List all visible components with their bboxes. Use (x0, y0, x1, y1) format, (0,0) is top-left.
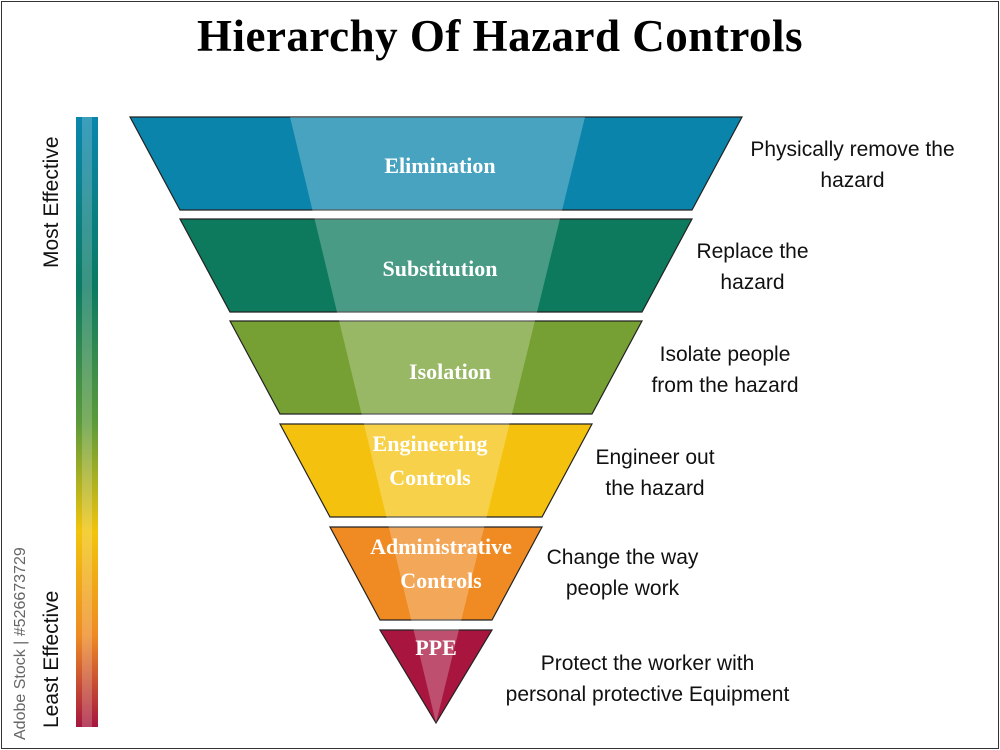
funnel diagram: PPE (415, 635, 457, 660)
watermark id: Adobe Stock | #526673729 (12, 547, 29, 740)
description: substitution (696, 240, 809, 294)
funnel diagram: Controls (400, 568, 482, 593)
description: isolation: from the hazard (651, 374, 799, 397)
description: administrative: people work (566, 577, 679, 600)
description: administrative (547, 546, 698, 600)
title: Hierarchy Of Hazard Controls (197, 11, 803, 61)
description: elimination (750, 138, 955, 192)
description: elimination: Physically remove the (750, 138, 955, 161)
description: substitution: Replace the (696, 240, 809, 263)
funnel diagram: Isolation (409, 359, 491, 384)
funnel diagram: Engineering (373, 431, 487, 456)
description: PPE: personal protective Equipment (506, 683, 789, 706)
description: PPE: Protect the worker with (541, 652, 754, 675)
description: substitution: hazard (720, 271, 785, 294)
description: elimination: hazard (820, 169, 885, 192)
description: administrative: Change the way (547, 546, 698, 569)
funnel diagram: Controls (389, 465, 471, 490)
label: most effective: Most Effective (40, 136, 63, 268)
description: engineering: the hazard (605, 477, 705, 500)
description: isolation (651, 343, 799, 397)
funnel diagram: Elimination (384, 153, 496, 178)
description: PPE (506, 652, 790, 706)
funnel diagram: Administrative (370, 534, 512, 559)
description: isolation: Isolate people (660, 343, 790, 366)
funnel diagram: Substitution (383, 256, 497, 281)
description: engineering: Engineer out (595, 446, 715, 469)
effectiveness gradient bar (76, 117, 98, 727)
label: least effective: Least Effective (40, 591, 63, 728)
description: engineering (595, 446, 715, 500)
